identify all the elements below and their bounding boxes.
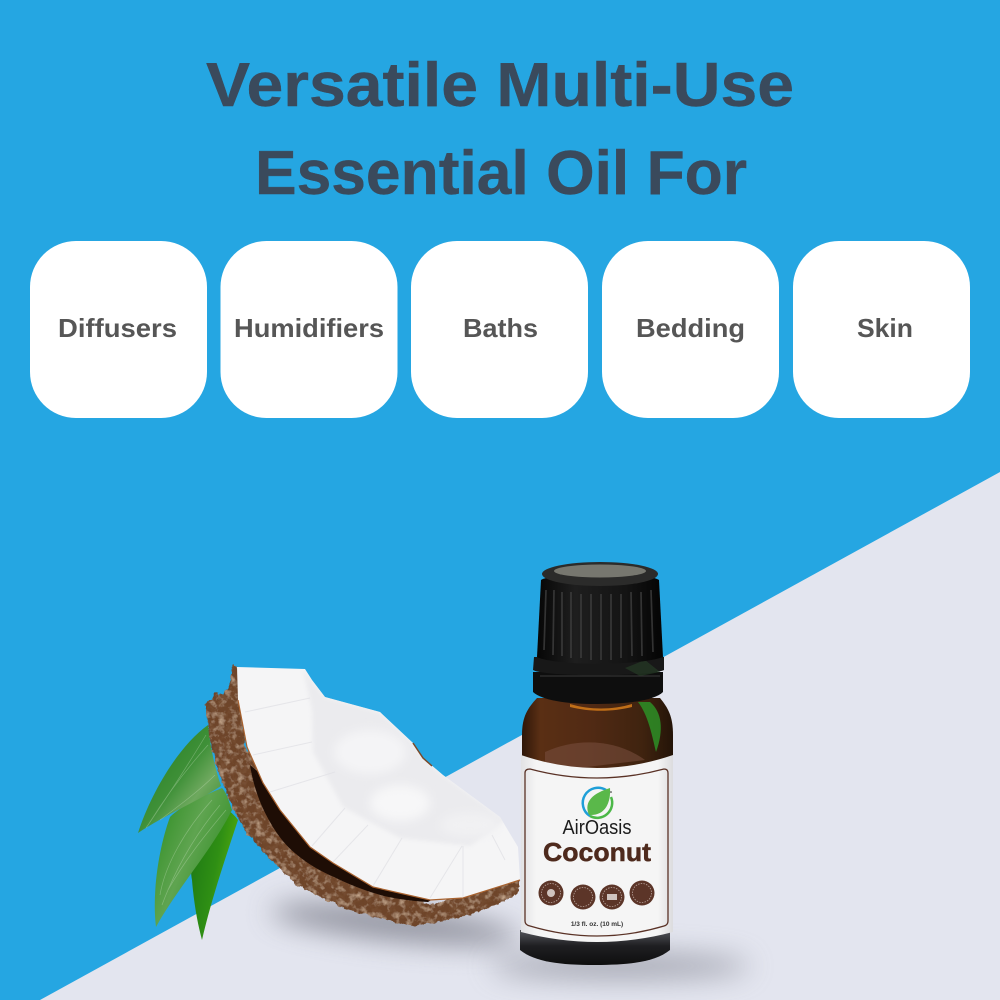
card: Bedding (602, 241, 779, 418)
bottle collar (533, 672, 663, 704)
coconut husk (205, 665, 519, 926)
title (206, 51, 794, 208)
bottle shadow (490, 953, 750, 979)
title: Essential Oil For (255, 139, 747, 208)
card: Humidifiers (220, 241, 398, 418)
glass green reflection (638, 702, 661, 752)
card: Baths (411, 241, 588, 418)
bottle cap (537, 574, 663, 664)
bottle glass shoulder (522, 698, 673, 770)
card: Diffusers (30, 241, 207, 418)
coconut (205, 665, 520, 926)
flesh brown tip (413, 743, 432, 766)
bottle base (520, 930, 670, 965)
card: Skin: Skin (857, 313, 913, 343)
brand logo (562, 788, 632, 839)
cap metal top (542, 562, 658, 586)
card: Baths: Baths (463, 313, 538, 343)
flesh brown edge (238, 700, 520, 900)
card: Skin (793, 241, 970, 418)
coconut flesh shading (245, 669, 505, 898)
certification badges (538, 880, 654, 910)
background light grey diagonal (40, 472, 1000, 1000)
coconut white flesh (237, 667, 520, 900)
volume text: 1/3 fl. oz. (10 mL) (571, 921, 623, 928)
coconut dark inner gap (250, 765, 440, 902)
icon: green leaves (138, 725, 238, 940)
bottle label (521, 755, 673, 942)
coconut shadow (269, 895, 521, 953)
card: Humidifiers: Humidifiers (234, 313, 384, 343)
brand logo: AirOasis (562, 817, 632, 839)
product name: Coconut (543, 837, 651, 867)
card: Bedding: Bedding (636, 313, 745, 343)
label frame (525, 769, 668, 936)
title: Versatile Multi-Use (206, 51, 794, 120)
card: Diffusers: Diffusers (58, 313, 177, 343)
product bottle (520, 562, 673, 965)
use cards row (30, 241, 970, 418)
